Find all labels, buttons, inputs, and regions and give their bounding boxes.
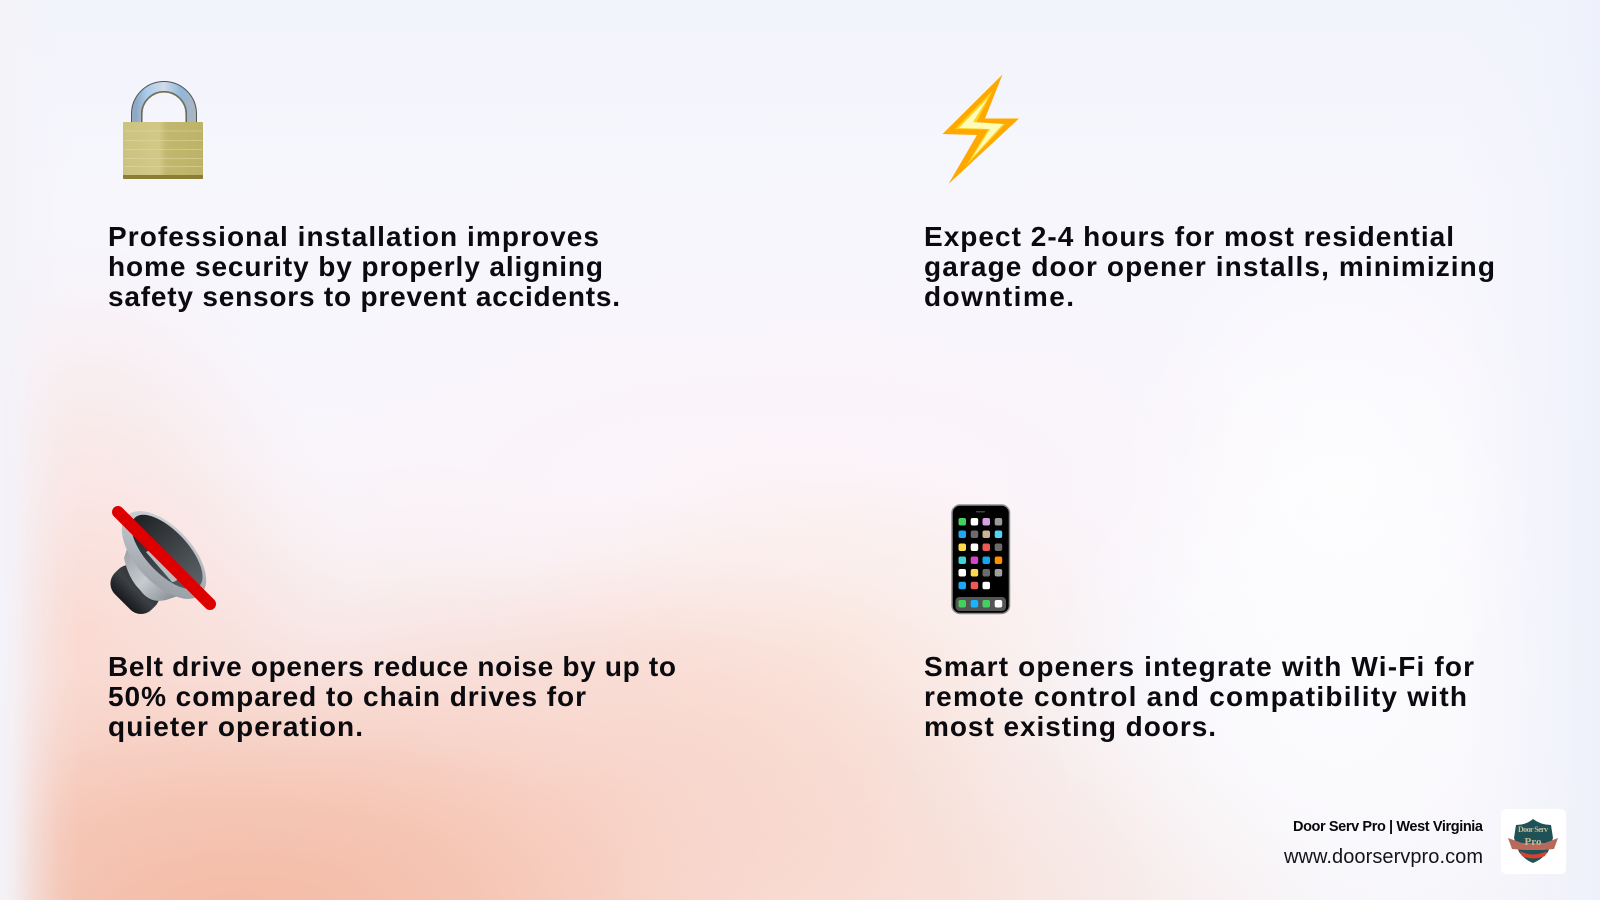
- text: home security: safety sensors to prevent accidents.: [108, 281, 620, 312]
- icon: padlock: [123, 87, 203, 179]
- panel: install time: [924, 74, 1504, 312]
- text: smart openers: most existing doors.: [924, 711, 1216, 742]
- panel: home security: [108, 87, 620, 312]
- text: quiet belt drive: Belt drive openers reduce noise by up to: [108, 651, 676, 682]
- text: home security: home security by properly aligning: [108, 251, 603, 282]
- text: home security: Professional installation improves: [108, 221, 599, 252]
- logo card: Pro: [1525, 836, 1542, 848]
- panel: quiet belt drive: [104, 496, 684, 742]
- text: install time: Expect 2-4 hours for most residential: [924, 221, 1454, 252]
- text: quiet belt drive: quieter operation.: [108, 711, 363, 742]
- logo card: Door Serv: [1518, 825, 1548, 834]
- text: install time: downtime.: [924, 281, 1074, 312]
- panel: smart openers: [924, 505, 1483, 742]
- brand name: Door Serv Pro | West Virginia: [1293, 819, 1484, 835]
- icon: muted speaker: [104, 496, 221, 620]
- text: smart openers: Smart openers integrate with Wi-Fi for: [924, 651, 1474, 682]
- text: install time: garage door opener installs, minimizing: [924, 251, 1495, 282]
- website: www.doorservpro.com: [1283, 846, 1483, 868]
- footer: brand: [1283, 809, 1566, 874]
- logo card: [1501, 809, 1566, 874]
- icon: lightning bolt: [942, 74, 1019, 184]
- icon: smartphone: [952, 505, 1010, 614]
- text: quiet belt drive: 50% compared to chain drives for: [108, 681, 586, 712]
- text: smart openers: remote control and compatibility with: [924, 681, 1467, 712]
